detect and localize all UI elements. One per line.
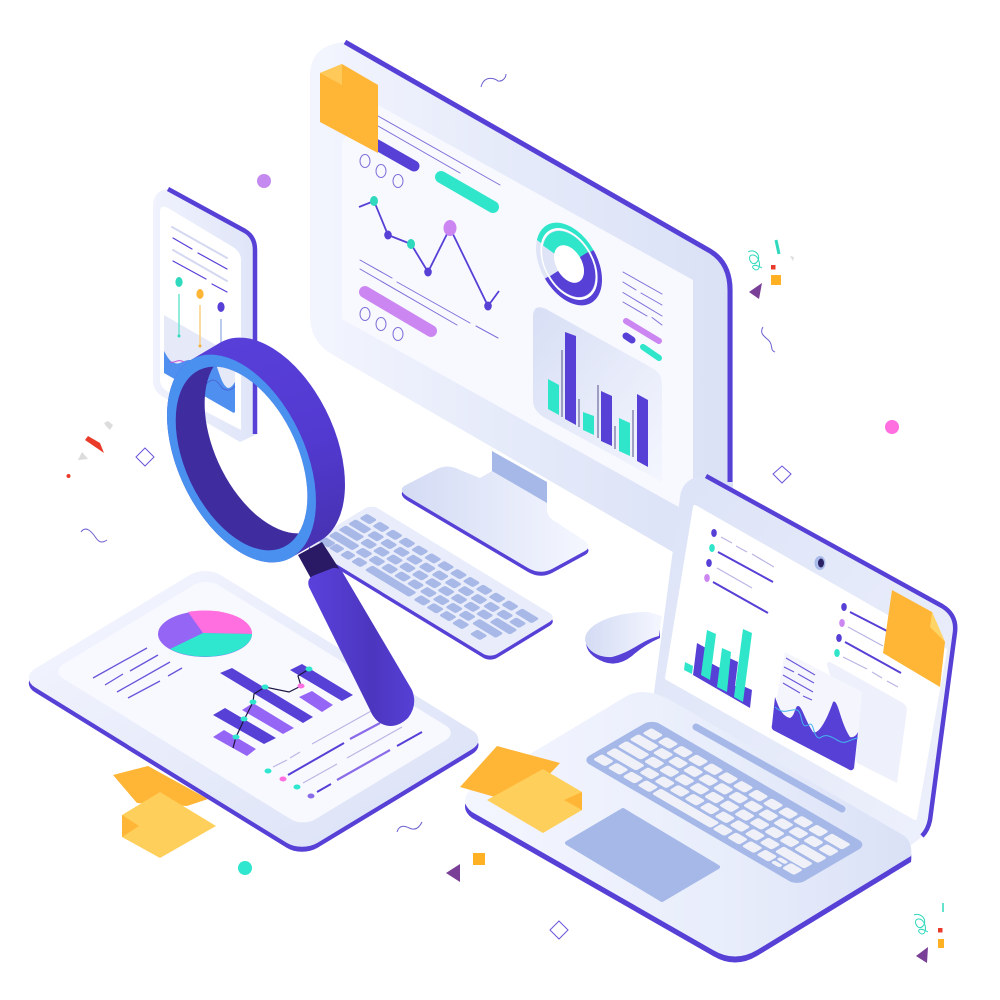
laptop left list bbox=[704, 529, 774, 613]
bar chart bbox=[548, 332, 648, 467]
laptop base top surface bbox=[465, 692, 911, 956]
donut chart bbox=[525, 193, 613, 335]
tablet right list lines bbox=[273, 710, 422, 792]
tablet bbox=[20, 566, 488, 857]
tablet list bullets bbox=[264, 768, 314, 798]
laptop base edge bbox=[465, 698, 911, 962]
phone lollipop chart bbox=[175, 277, 225, 350]
phone text lines bbox=[172, 227, 227, 292]
line chart bbox=[359, 196, 499, 310]
lower text lines and pill bbox=[360, 260, 498, 338]
option circles top bbox=[360, 154, 403, 188]
confetti upper right bbox=[748, 240, 794, 299]
monitor screen bbox=[342, 105, 693, 515]
phone screen bbox=[160, 207, 241, 430]
confetti bottom centre bbox=[446, 853, 485, 882]
magnifier neck bbox=[298, 542, 340, 584]
bar chart panel bbox=[533, 307, 662, 482]
decorative squiggles bbox=[81, 74, 775, 832]
computer mouse bbox=[585, 612, 662, 664]
sticky note on monitor bbox=[320, 64, 378, 153]
laptop lid purple edge bbox=[706, 476, 955, 836]
keyboard keys bbox=[318, 513, 539, 648]
monitor stand neck bbox=[492, 451, 547, 510]
laptop lid bbox=[653, 475, 957, 846]
phone blue area chart bbox=[164, 351, 235, 413]
monitor stand base bbox=[402, 466, 588, 576]
tablet purple edge bbox=[20, 571, 488, 857]
laptop keys bbox=[593, 727, 851, 877]
laptop bar chart bbox=[684, 629, 752, 708]
phone purple edge bbox=[168, 189, 255, 434]
magnifier ring bbox=[171, 329, 312, 588]
confetti bottom right bbox=[914, 903, 944, 963]
confetti left bbox=[66, 421, 113, 478]
desktop monitor bbox=[310, 42, 733, 576]
monitor keyboard bbox=[305, 504, 557, 662]
tablet left text lines bbox=[93, 648, 182, 698]
laptop right list bbox=[834, 603, 901, 687]
pie chart bbox=[158, 610, 252, 657]
trend line with markers bbox=[232, 666, 312, 748]
touchpad bbox=[567, 810, 718, 900]
speaker bar bbox=[696, 727, 842, 809]
magnifying glass bbox=[171, 329, 414, 726]
laptop pale panel bbox=[827, 662, 907, 783]
phone body bbox=[153, 189, 257, 442]
sticky note on laptop screen bbox=[883, 590, 945, 687]
keyboard plate bbox=[305, 504, 557, 658]
monitor bezel bbox=[310, 42, 733, 555]
magnifier grip bbox=[308, 568, 414, 726]
top text lines and pills bbox=[370, 116, 500, 207]
smartphone bbox=[153, 189, 257, 442]
tablet body bbox=[20, 566, 488, 852]
phone grey panel bbox=[164, 315, 235, 400]
isometric bars bbox=[213, 664, 353, 756]
keyboard purple edge bbox=[305, 508, 557, 662]
sticky notes under tablet bbox=[113, 766, 216, 858]
laptop camera bbox=[814, 556, 826, 570]
side text lines and small pills bbox=[623, 272, 662, 358]
option circles bottom bbox=[360, 308, 403, 340]
decorative dots bbox=[238, 174, 899, 875]
decorative diamonds bbox=[136, 448, 791, 939]
monitor purple top edge bbox=[345, 42, 730, 482]
laptop area chart bbox=[772, 697, 858, 770]
sticky notes on laptop base bbox=[460, 746, 582, 833]
laptop screen bbox=[667, 507, 945, 818]
laptop area chart text lines bbox=[783, 658, 815, 700]
laptop bbox=[460, 475, 957, 962]
laptop keyboard bbox=[582, 719, 867, 885]
laptop area chart panel bbox=[772, 652, 862, 770]
tablet screen bbox=[51, 578, 458, 827]
